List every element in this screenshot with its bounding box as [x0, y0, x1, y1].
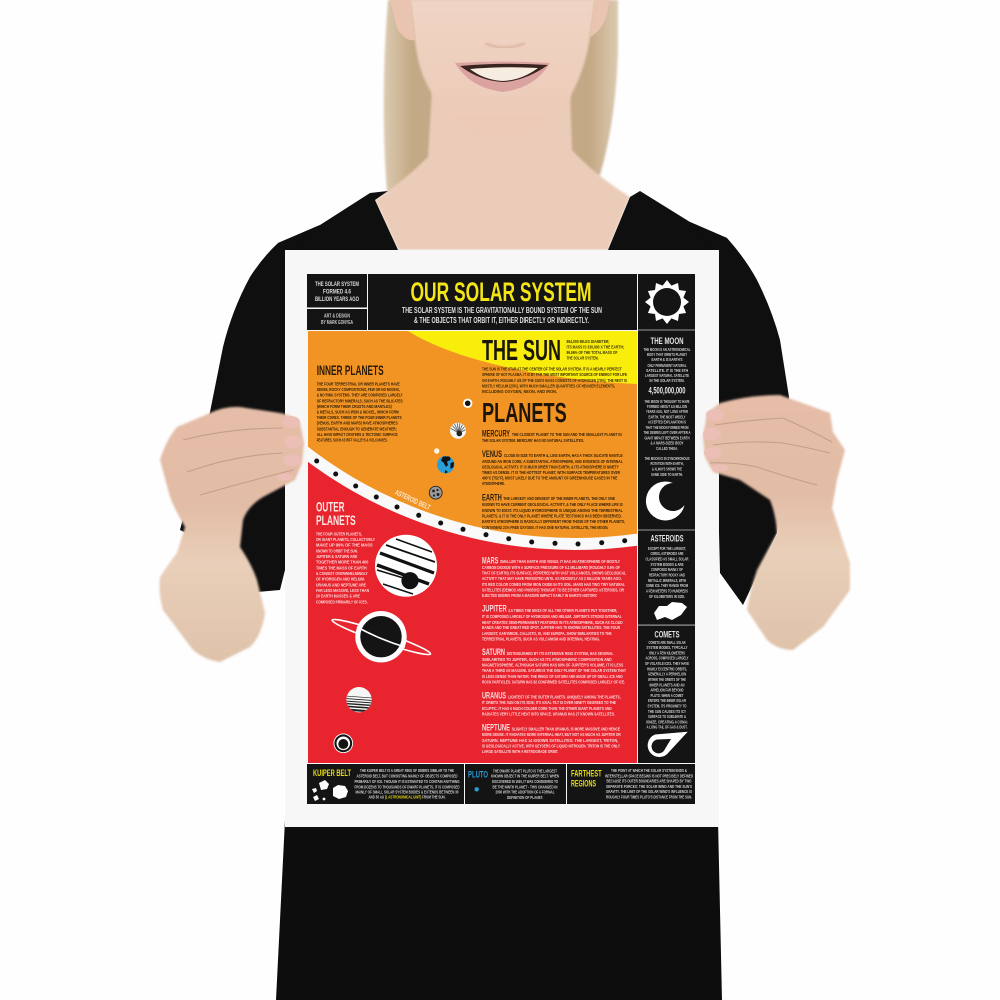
heading: outer planets: OUTER [316, 499, 344, 515]
icon: comet [648, 732, 688, 757]
text: farthest regions: GRAVITY. THE LIMIT OF THE SOLAR WIND'S INFLUENCE IS [606, 789, 692, 794]
icon: jupiter [375, 535, 437, 597]
text: pluto: BE THE NINTH PLANET - THIS CHANGED IN [492, 784, 558, 789]
heading: outer planets [316, 499, 356, 528]
text: outer planets: MAKE UP 99% OF THE MASS [316, 543, 373, 549]
text: outer planets: COMPOSED PRIMARILY OF ICES. [316, 599, 368, 605]
text: saturn: IS LESS DENSE THAN WATER. THE RINGS OF SATURN ARE MADE UP OF SMALL ICE AND [482, 674, 623, 680]
icon: venus [450, 422, 467, 439]
text: comets: IONIZE, CREATING A COMA: [646, 719, 688, 725]
panel: main background zones [308, 331, 637, 763]
text: moon formation: FORMED ABOUT 4.5 BILLION [647, 404, 687, 410]
text: neptune: IS GEOLOGICALLY ACTIVE, WITH GEYSERS OF LIQUID NITROGEN. TRITON IS THE ONLY [482, 744, 620, 750]
panel: header info [307, 274, 367, 330]
text: uranus: IT ORBITS THE SUN ON ITS SIDE; ITS AXIAL TILT IS OVER NINETY DEGREES TO THE [482, 700, 616, 706]
text: kuiper belt [354, 768, 460, 799]
text: saturn [482, 647, 626, 686]
text: venus: TIMES AS DENSE. IT IS THE HOTTEST PLANET, WITH SURFACE TEMPERATURES OVER [482, 470, 620, 476]
poster sheet [285, 250, 719, 827]
nose shadow [485, 43, 525, 48]
text: farthest regions: THE POINT AT WHICH THE SOLAR SYSTEM ENDS & [611, 768, 687, 773]
text: asteroids: SYSTEM BODIES & ARE [650, 562, 684, 568]
text: kuiper belt: MAINLY OF SMALL SOLAR SYSTEM BODIES & EXTENDS BETWEEN 30 [356, 789, 459, 794]
text: asteroids: CLASSIFIED AS SMALL SOLAR [646, 556, 689, 562]
text: moon intro: LARGEST NATURAL SATELLITE [645, 373, 689, 379]
text: inner planets: (WHICH FORM THEIR CRUSTS AND MANTLES) [317, 404, 392, 410]
text: mercury [482, 428, 622, 444]
text: comets: HIGHLY ECCENTRIC ORBITS, [647, 666, 687, 672]
panel: farthest regions [567, 764, 695, 804]
text: moon intro: SATELLITE. IT IS THE 5TH [646, 368, 688, 374]
text: moon intro [644, 347, 690, 384]
text: outer planets: JUPITER & SATURN ARE [316, 554, 358, 560]
text: outer planets: URANUS AND NEPTUNE ARE [316, 582, 367, 588]
text: sun stats: THE SOLAR SYSTEM. [566, 356, 599, 362]
shirt upper and lower [278, 191, 727, 250]
text: jupiter: LARGEST, GANYMEDE, CALLISTO, IO, AND EUROPA, SHOW SIMILARITIES TO THE [482, 631, 612, 637]
title block: & THE OBJECTS THAT ORBIT IT, EITHER DIRECTLY OR INDIRECTLY. [414, 316, 589, 325]
panel: pluto [465, 764, 566, 804]
text: earth: EARTH [482, 492, 502, 504]
asteroid belt label: ASTEROID BELT [394, 488, 432, 512]
text: jupiter: IT IS COMPOSED LARGELY OF HYDROGEN AND HELIUM. JUPITER'S STRONG INTERNAL [482, 614, 622, 620]
text: mercury: THE SOLAR SYSTEM. MERCURY HAS NO NATURAL SATELLITES. [482, 438, 584, 444]
text: earth: EARTH'S ATMOSPHERE IS RADICALLY DIFFERENT FROM THOSE OF THE OTHER PLANETS, [482, 519, 625, 525]
text: jupiter: JUPITER [482, 604, 507, 615]
icon: sun [645, 280, 689, 324]
text: mars: THAT OF EARTH). ITS SURFACE, PEPPERED WITH VAST VOLCANOES, SHOWS GEOLOGICAL [482, 570, 626, 576]
text: saturn: MAGNETOSPHERE. ALTHOUGH SATURN HAS 60% OF JUPITER'S VOLUME, IT IS LESS [482, 662, 624, 668]
text: pluto: 2006 WITH THE ADOPTION OF A FORMAL [496, 789, 555, 794]
text: inner planets: ALL HAVE IMPACT CRATERS & TECTONIC SURFACE [317, 432, 398, 438]
icon: neptune [334, 734, 353, 753]
title block: OUR SOLAR SYSTEM [410, 277, 592, 307]
text: comets: SURFACE TO SUBLIMATE & [648, 714, 686, 720]
text: kuiper belt: AND 50 AU (1 ASTRONOMICAL UNIT) FROM THE SUN. [368, 794, 446, 799]
text: comets: A LONG TAIL OF GAS & DUST. [646, 725, 688, 731]
panel: header info: THE SOLAR SYSTEM [315, 281, 359, 288]
heading: inner planets: INNER PLANETS [317, 362, 384, 378]
text: jupiter: HEAT CREATES SEMI-PERMANENT FEATURES IN ITS ATMOSPHERE, SUCH AS CLOUD [482, 620, 623, 626]
text: moon intro: BODY THAT ORBITS PLANET [647, 352, 687, 358]
heading: farthest regions: FARTHEST [571, 768, 602, 779]
panel: header info: BILLION YEARS AGO [315, 296, 359, 303]
text: inner planets: THEIR CORES. THREE OF THE FOUR INNER PLANETS [317, 415, 402, 421]
icon: pluto dot [474, 787, 479, 792]
text: asteroids: SOME ICE. THEY RANGE FROM [646, 583, 688, 589]
heading: comets: COMETS [654, 629, 680, 639]
right hand and forearm [703, 395, 850, 650]
text: pluto: DISCOVERED IN 1930, IT WAS CONSIDERED TO [492, 779, 558, 784]
heading: the moon: THE MOON [650, 336, 684, 346]
panel: header info: BY MARK GONYEA [321, 320, 353, 326]
panel: header info: ART & DESIGN [324, 314, 350, 320]
text: saturn: THAN A THIRD AS MASSIVE. SATURN IS THE ONLY PLANET OF THE SOLAR SYSTEM THAT [482, 668, 626, 674]
text: moon intro: THE MOON IS AN ASTRONOMICAL [644, 347, 690, 353]
text: mercury: THE CLOSEST PLANET TO THE SUN AND THE SMALLEST PLANET IN [512, 432, 622, 438]
text: pluto: DEFINITION OF PLANET. [507, 795, 543, 800]
hair [384, 0, 618, 192]
text: earth: CONTAINING 21% FREE OXYGEN. IT HAS ONE NATURAL SATELLITE, THE MOON. [482, 525, 609, 531]
text: outer planets: OR GIANT PLANETS, COLLECTIVELY [316, 537, 375, 543]
text: moon intro: ONLY PERMANENT NATURAL [648, 363, 687, 369]
text: kuiper belt: FROM DOZENS TO THOUSANDS OF DWARF PLANETS, IT IS COMPOSED [354, 784, 460, 789]
text: sun description: THE SUN IS THE STAR AT THE CENTER OF THE SOLAR SYSTEM. IT IS A NEARLY PERFECT [482, 366, 622, 372]
text: mercury: MERCURY [482, 428, 510, 440]
sun segment [408, 331, 637, 384]
icon: mars [429, 486, 442, 499]
icon: moon dot [434, 448, 439, 454]
text: kuiper belt: ASTEROID BELT, BUT CONSISTING MAINLY OF OBJECTS COMPOSED [356, 774, 458, 779]
text: jupiter: TERRESTRIAL PLANETS, SUCH AS VOLCANISM AND INTERNAL HEATING. [482, 636, 600, 642]
icon: mercury [463, 399, 472, 408]
text: comets: INNER PLANETS AND AN [650, 682, 685, 688]
text: farthest regions: SEPARATE FORCES: THE SOLAR WIND AND THE SUN'S [606, 784, 692, 789]
heading: kuiper belt: KUIPER BELT [313, 768, 351, 779]
text: asteroids: A FEW METERS TO HUNDREDS [646, 588, 688, 594]
text: jupiter [482, 604, 623, 642]
text: asteroids: OF KILOMETERS IN SIZE. [649, 594, 685, 600]
text: earth: KNOWN TO EXIST. ITS LIQUID HYDROSPHERE IS UNIQUE AMONG THE TERRESTRIAL [482, 508, 623, 514]
text: earth: KNOWN TO HAVE CURRENT GEOLOGICAL ACTIVITY, & THE ONLY PLACE WHERE LIFE IS [482, 502, 623, 508]
text: mars: ITS RED COLOR COMES FROM IRON OXIDE IN ITS SOIL. MARS HAS TWO TINY NATURAL [482, 582, 625, 588]
text: comets: SYSTEM BODIES, TYPICALLY [646, 645, 688, 651]
text: sun description: INCLUDING OXYGEN, NEON, AND IRON. [482, 389, 557, 395]
text: inner planets: DENSE, ROCKY COMPOSITIONS, FEW OR NO MOONS, [317, 387, 400, 393]
teeth [470, 67, 538, 81]
panel: right column [638, 274, 695, 763]
text: venus: AROUND AN IRON CORE, A SUBSTANTIAL ATMOSPHERE, AND EVIDENCE OF INTERNAL [482, 459, 623, 465]
face [410, 0, 595, 137]
text: outer planets: TIMES THE MASS OF EARTH [316, 565, 367, 571]
text: inner planets [317, 381, 403, 444]
poster content [307, 274, 695, 804]
text: outer planets: OF HYDROGEN AND HELIUM. [316, 577, 365, 583]
text: moon formation: THAT THE MOON FORMED FROM [646, 425, 688, 431]
text: kuiper belt: THE KUIPER BELT IS A GREAT RING OF DEBRIS SIMILAR TO THE [360, 768, 454, 773]
text: sun stats: 99.86% OF THE TOTAL MASS OF [566, 350, 618, 356]
text: asteroids: METALLIC MINERALS, WITH [648, 578, 686, 584]
text: saturn: ROCK PARTICLES. SATURN HAS 82 CONFIRMED SATELLITES COMPOSED LARGELY OF ICE. [482, 680, 625, 686]
text: neptune: LARGE SATELLITE WITH A RETROGRADE ORBIT. [482, 749, 559, 755]
text: kuiper belt: PRIMARILY OF ICE. THOUGH IT IS ESTIMATED TO CONTAIN ANYTHING [354, 779, 460, 784]
text: moon formation: CALLED THEIA. [656, 446, 678, 452]
text: jupiter: BANDS AND THE GREAT RED SPOT. JUPITER HAS 79 KNOWN SATELLITES. THE FOUR [482, 625, 620, 631]
heading: farthest regions: REGIONS [571, 779, 596, 790]
title block: THE SOLAR SYSTEM IS THE GRAVITATIONALLY BOUND SYSTEM OF THE SUN [402, 306, 602, 315]
text: moon formation: ACCEPTED EXPLANATION IS [648, 420, 686, 426]
text: pluto [491, 768, 559, 800]
panel: kuiper belt [307, 764, 464, 804]
text: outer planets: & CONSIST OVERWHELMINGLY [316, 571, 368, 577]
text: asteroids: CERES, ASTEROIDS ARE [650, 551, 684, 557]
text: outer planets: FAR LESS MASSIVE, LESS THAN [316, 588, 369, 594]
text: uranus: RADIATES VERY LITTLE HEAT INTO SPACE. URANUS HAS 27 KNOWN SATELLITES. [482, 712, 615, 718]
text: inner planets: & METALS, SUCH AS IRON & NICKEL, WHICH FORM [317, 409, 399, 415]
text: neptune: SATURN. NEPTUNE HAS 14 KNOWN SATELLITES. THE LARGEST, TRITON, [482, 738, 619, 744]
text: venus: CLOSE IN SIZE TO EARTH &, LIKE EARTH, HAS A THICK SILICATE MANTLE [504, 453, 623, 459]
text: mars: EJECTED DEBRIS FROM A MASSIVE IMPACT EARLY IN MARS'S HISTORY. [482, 593, 598, 599]
text: earth [482, 492, 625, 531]
text: venus: GEOLOGICAL ACTIVITY. IT IS MUCH DRIER THAN EARTH, & ITS ATMOSPHERE IS NINETY [482, 464, 619, 470]
text: saturn: DISTINGUISHED BY ITS EXTENSIVE RING SYSTEM, HAS SEVERAL [507, 651, 613, 657]
text: venus: 400°C (752°F), MOST LIKELY DUE TO THE AMOUNT OF GREENHOUSE GASES IN THE [482, 476, 618, 482]
text: uranus: URANUS [482, 690, 506, 701]
text: sun stats [566, 339, 624, 362]
left hand and forearm [159, 407, 304, 662]
text: outer planets [316, 531, 375, 605]
text: venus [482, 449, 623, 487]
text: asteroids: COMPOSED MAINLY OF [651, 567, 683, 573]
text: outer planets: THE FOUR OUTER PLANETS, [316, 531, 362, 537]
mouth shadow [460, 64, 548, 82]
heading: asteroids: ASTEROIDS [650, 533, 684, 543]
text: inner planets: & NO RING SYSTEMS. THEY ARE COMPOSED LARGELY [317, 393, 403, 399]
text: farthest regions: BECAUSE ITS OUTER BOUNDARIES ARE SHAPED BY TWO [606, 779, 692, 784]
right sleeve [690, 222, 789, 605]
text: comets: ONLY A FEW KILOMETERS [649, 650, 685, 656]
text: sun description: SPHERE OF HOT PLASMA. IT IS BY FAR THE MOST IMPORTANT SOURCE OF ENERGY FOR LIFE [482, 372, 627, 378]
text: moon rotation: THE MOON IS IN SYNCHRONOUS [644, 456, 690, 462]
text: mars: CARBON DIOXIDE WITH A SURFACE PRESSURE OF 6.1 MILLIBARS (ROUGHLY 0.6% OF [482, 565, 620, 571]
text: asteroids: EXCEPT FOR THE LARGEST, [648, 546, 686, 552]
text: uranus [482, 690, 621, 718]
text: comets: PLUTO. WHEN A COMET [650, 693, 684, 699]
text: moon formation: & A MARS-SIZED BODY [650, 441, 684, 447]
ears [390, 0, 610, 40]
heading: farthest regions [571, 768, 602, 790]
text: inner planets: THE FOUR TERRESTRIAL OR INNER PLANETS HAVE [317, 381, 400, 387]
icon: crescent moon [646, 481, 684, 520]
text: moon rotation [644, 456, 690, 478]
text: comets: SYSTEM, ITS PROXIMITY TO [648, 704, 687, 710]
text: comets: WITHIN THE ORBITS OF THE [648, 677, 686, 683]
text: moon formation: GIANT IMPACT BETWEEN EARTH [644, 435, 690, 441]
text: comets: ENTERS THE INNER SOLAR [648, 698, 686, 704]
text: moon formation: YEARS AGO, NOT LONG AFTER [646, 409, 688, 415]
text: neptune: SLIGHTLY SMALLER THAN URANUS, IS MORE MASSIVE AND HENCE [512, 726, 620, 732]
text: moon intro: IN THE SOLAR SYSTEM. [650, 378, 685, 384]
figure: moon age: 4,500,000,000 [648, 385, 686, 395]
asteroid belt band [308, 446, 637, 550]
text: inner planets: (VENUS, EARTH AND MARS) HAVE ATMOSPHERES [317, 421, 398, 427]
panel: header info: FORMED 4.6 [323, 288, 351, 295]
text: moon formation: EARTH. THE MOST WIDELY [648, 414, 686, 420]
lips [455, 62, 550, 92]
text: outer planets: TOGETHER MORE THAN 400 [316, 560, 369, 566]
text: comets: OF VOLATILE ICES. THEY HAVE [645, 661, 689, 667]
text: moon rotation: ROTATION WITH EARTH, [650, 461, 684, 467]
text: mars: ACTIVITY THAT MAY HAVE PERSISTED UNTIL AS RECENTLY AS 2 MILLION YEARS AGO. [482, 576, 622, 582]
neck and chest [375, 90, 630, 250]
text: asteroids: REFRACTORY ROCKY AND [649, 572, 685, 578]
text: sun description: ON EARTH. ROUGHLY 3/4 OF THE SUN'S MASS CONSISTS OF HYDROGEN (73%); THE REST IS [482, 378, 627, 384]
text: moon rotation: & ALWAYS SHOWS THE [652, 466, 682, 472]
text: pluto: KNOWN OBJECT IN THE KUIPER BELT. WHEN [491, 774, 559, 779]
text: farthest regions: INTERSTELLAR SPACE BEGINS IS NOT PRECISELY DEFINED [605, 773, 693, 778]
text: earth: THE LARGEST AND DENSEST OF THE INNER PLANETS, THE ONLY ONE [503, 496, 615, 502]
text: farthest regions [605, 768, 693, 800]
text: venus: VENUS [482, 449, 502, 460]
heading: outer planets: PLANETS [316, 512, 356, 528]
left sleeve [180, 225, 320, 592]
text: sun description [482, 366, 627, 395]
text: moon intro: EARTH & IS EARTH'S [652, 357, 683, 363]
text: moon rotation: SAME SIDE TO EARTH. [651, 472, 683, 478]
text: comets: APHELION FAR BEYOND [650, 688, 684, 694]
text: neptune: MORE DENSE. IT RADIATES MORE INTERNAL HEAT, BUT NOT AS MUCH AS JUPITER OR [482, 732, 621, 738]
text: comets: ACROSS, COMPOSED LARGELY [646, 656, 689, 662]
asteroid belt dots [314, 458, 627, 546]
text: comets: GENERALLY A PERIHELION [648, 672, 686, 678]
text: outer planets: KNOWN TO ORBIT THE SUN. [316, 548, 358, 554]
heading: the sun: THE SUN [482, 335, 561, 367]
text: uranus: LIGHTEST OF THE OUTER PLANETS. UNIQUELY AMONG THE PLANETS, [508, 694, 621, 700]
text: mars: SATELLITES (DEIMOS AND PHOBOS) THOUGHT TO BE EITHER CAPTURED ASTEROIDS, OR [482, 588, 624, 594]
text: moon formation [644, 399, 691, 452]
text: comets: COMETS ARE SMALL SOLAR [648, 640, 686, 646]
icon: uranus [345, 687, 373, 712]
text: jupiter: 2.5 TIMES THE MASS OF ALL THE OTHER PLANETS PUT TOGETHER, [508, 608, 618, 614]
text: sun description: MOSTLY HELIUM (25%), WITH MUCH SMALLER QUANTITIES OF HEAVIER ELEMENTS, [482, 384, 615, 390]
text: moon formation: THE DEBRIS LEFT OVER AFTER A [644, 430, 691, 436]
text: mars [482, 555, 626, 599]
text: venus: ATMOSPHERE. [482, 481, 505, 487]
text: asteroids [646, 546, 689, 600]
text: saturn: SATURN [482, 647, 505, 658]
text: inner planets: SUBSTANTIAL ENOUGH TO GENERATE WEATHER; [317, 426, 397, 432]
text: uranus: ECLIPTIC. IT HAS A MUCH COLDER CORE THAN THE OTHER GIANT PLANETS AND [482, 706, 612, 712]
shirt lower body [276, 820, 722, 1000]
text: comets: THE SUN CAUSES ITS ICY [648, 709, 686, 715]
icon: saturn [331, 611, 432, 662]
text: inner planets: OF REFRACTORY MINERALS, SUCH AS THE SILICATES [317, 398, 403, 404]
text: saturn: SIMILARITIES TO JUPITER, SUCH AS ITS ATMOSPHERIC COMPOSITION AND [482, 657, 612, 663]
text: pluto: THE DWARF PLANET PLUTO IS THE LARGEST [493, 768, 557, 773]
text: mars: MARS [482, 555, 498, 566]
text: farthest regions: ROUGHLY FOUR TIMES PLUTO'S DISTANCE FROM THE SUN. [606, 794, 692, 800]
heading: planets: PLANETS [482, 397, 567, 428]
text: outer planets: 20 EARTH MASSES & ARE [316, 594, 361, 600]
text: neptune [482, 723, 621, 755]
text: mars: SMALLER THAN EARTH AND VENUS. IT HAS AN ATMOSPHERE OF MOSTLY [500, 559, 620, 565]
icon: kuiper belt rocks [312, 780, 348, 801]
text: sun stats: 864,000 MILES DIAMETER; [566, 339, 610, 345]
text: inner planets: FEATURES, SUCH AS RIFT VALLEYS & VOLCANOES. [317, 438, 388, 444]
heading: pluto: PLUTO [468, 770, 488, 780]
text: neptune: NEPTUNE [482, 723, 510, 734]
text: earth: PLANETS, & IT IS THE ONLY PLANET WHERE PLATE TECTONICS HAS BEEN OBSERVED. [482, 514, 622, 520]
text: sun stats: ITS MASS IS 330,000 X THE EARTH; [566, 344, 624, 350]
icon: asteroid [654, 602, 687, 620]
icon: earth [437, 456, 454, 474]
text: comets [645, 640, 689, 731]
title block [368, 274, 637, 330]
text: moon formation: THE MOON IS THOUGHT TO HAVE [644, 399, 690, 405]
